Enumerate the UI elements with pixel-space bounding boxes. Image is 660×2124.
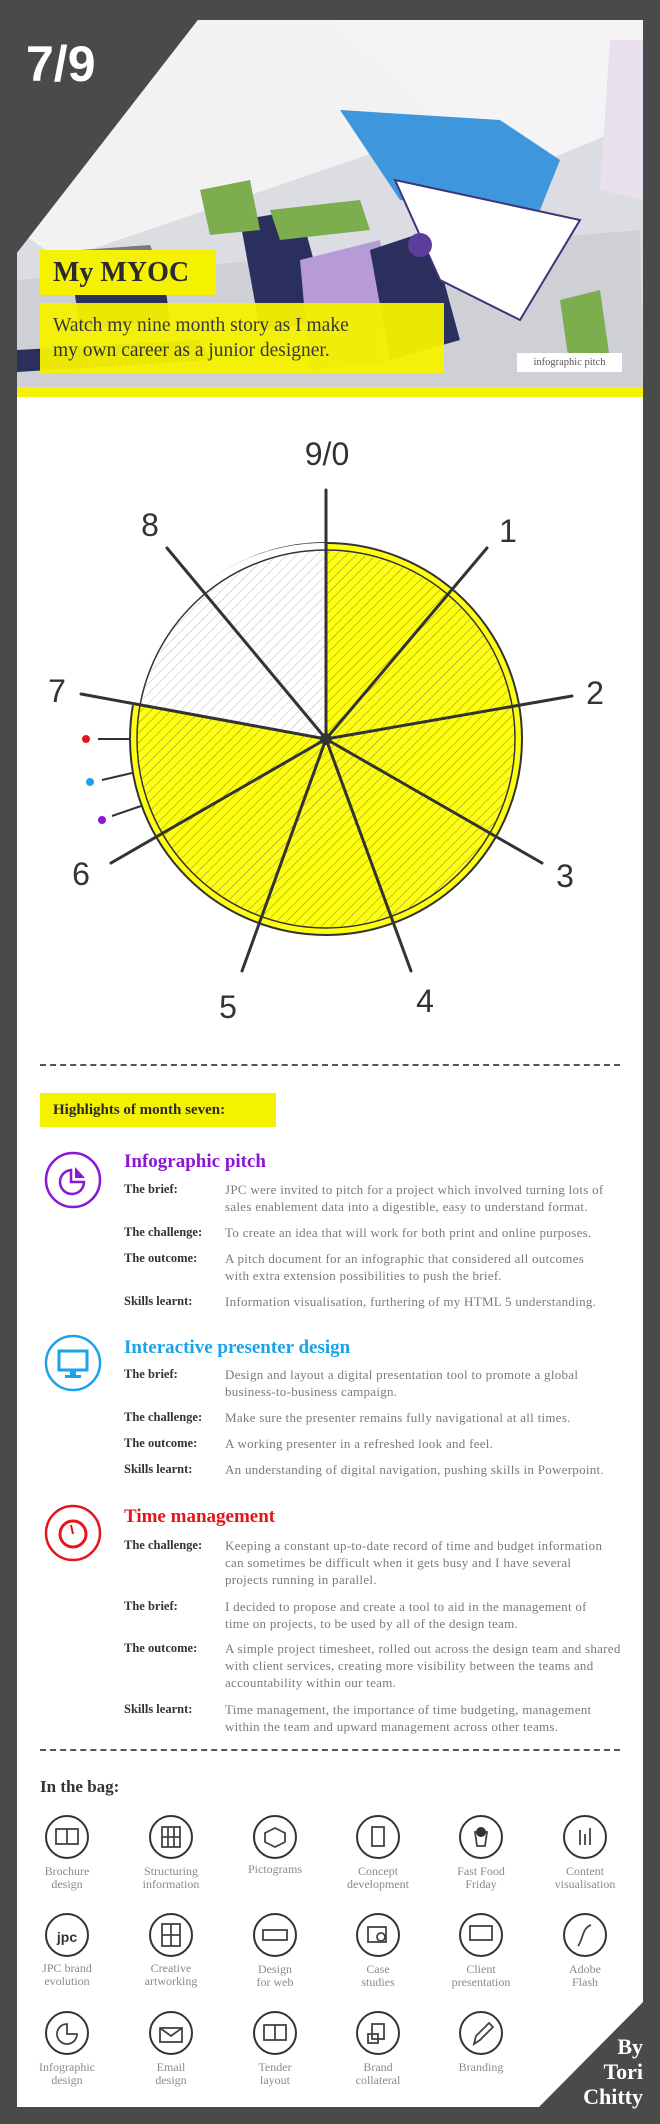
title: Infographic pitch xyxy=(124,1151,266,1172)
section: interactive presenter: A working presenter in a refreshed look and feel. xyxy=(225,1436,493,1451)
pie chart: months: 6 xyxy=(72,856,90,892)
skills icon grid: studies xyxy=(361,1975,395,1989)
pie chart: months: 3 xyxy=(556,858,574,894)
skills icon grid xyxy=(39,1815,616,2087)
section: time management: The challenge: xyxy=(124,1538,202,1552)
section: interactive presenter: business-to-business campaign. xyxy=(225,1384,397,1399)
subtitle box xyxy=(40,303,444,373)
section: time management: Skills learnt: xyxy=(124,1702,192,1716)
title box: My MYOC xyxy=(53,257,189,288)
section: time management: Keeping a constant up-to-date record of time and budget information xyxy=(225,1538,602,1553)
section: infographic pitch: The outcome: xyxy=(124,1251,197,1265)
section: time management: accountability within our team. xyxy=(225,1675,396,1690)
section: interactive presenter: Design and layout a digital presentation tool to promote a global xyxy=(225,1367,578,1382)
section: interactive presenter: The outcome: xyxy=(124,1436,197,1450)
skills icon grid: Flash xyxy=(572,1975,598,1989)
skills icon grid: Tender xyxy=(258,2060,292,2074)
byline: Tori xyxy=(603,2059,643,2084)
skills icon grid: information xyxy=(143,1877,199,1891)
section: time management: time on projects, to be used by all of the design team. xyxy=(225,1616,518,1631)
section: infographic pitch: sales enablement data into a digestible, easy to understand format. xyxy=(225,1199,588,1214)
skills icon grid: Fast Food xyxy=(457,1864,505,1878)
section: interactive presenter: Skills learnt: xyxy=(124,1462,192,1476)
pie chart: months: 2 xyxy=(586,675,604,711)
skills icon grid: Creative xyxy=(151,1961,191,1975)
section: infographic pitch: To create an idea that will work for both print and online purposes. xyxy=(225,1225,592,1240)
skills icon grid: Adobe xyxy=(569,1962,601,1976)
subtitle box: my own career as a junior designer. xyxy=(53,340,330,361)
section: interactive presenter: The challenge: xyxy=(124,1410,202,1424)
section: time management: The outcome: xyxy=(124,1641,197,1655)
pie chart: months: 9/0 xyxy=(305,436,349,472)
label: infographic pitch: infographic pitch xyxy=(533,357,606,368)
title box xyxy=(40,250,216,295)
subtitle box: Watch my nine month story as I make xyxy=(53,315,349,336)
pie chart: months xyxy=(48,436,604,1025)
title: Interactive presenter design xyxy=(124,1337,350,1358)
section: interactive presenter xyxy=(44,1334,604,1477)
skills icon grid: Email xyxy=(157,2060,185,2074)
section: infographic pitch: The brief: xyxy=(124,1182,178,1196)
skills icon grid: jpc xyxy=(56,1929,77,1945)
month markers xyxy=(82,735,90,743)
skills icon grid: Brochure xyxy=(45,1864,89,1878)
skills icon grid: presentation xyxy=(452,1975,510,1989)
pie chart: months: 5 xyxy=(219,989,237,1025)
section: infographic pitch: The challenge: xyxy=(124,1225,202,1239)
skills icon grid: Client xyxy=(466,1962,496,1976)
skills icon grid: visualisation xyxy=(555,1877,615,1891)
section: interactive presenter: An understanding of digital navigation, pushing skills in Powerpoint. xyxy=(225,1462,604,1477)
section: infographic pitch: A pitch document for an infographic that considered all outcomes xyxy=(225,1251,584,1266)
skills icon grid: design xyxy=(51,1877,83,1891)
skills icon grid: Branding xyxy=(459,2060,503,2074)
section: time management: projects running in parallel. xyxy=(225,1572,377,1587)
byline: Chitty xyxy=(583,2084,643,2109)
skills icon grid: design xyxy=(51,2073,83,2087)
byline xyxy=(583,2034,643,2109)
section: time management xyxy=(44,1504,621,1734)
section: time management: The brief: xyxy=(124,1599,178,1613)
heading: highlights: Highlights of month seven: xyxy=(53,1102,225,1118)
skills icon grid: evolution xyxy=(44,1974,90,1988)
divider xyxy=(40,1749,620,1751)
skills icon grid: Design xyxy=(258,1962,292,1976)
skills icon grid: artworking xyxy=(145,1974,197,1988)
skills icon grid: collateral xyxy=(356,2073,400,2087)
heading: highlights xyxy=(40,1093,276,1127)
byline: By xyxy=(617,2034,643,2059)
skills icon grid: development xyxy=(347,1877,409,1891)
skills icon grid: layout xyxy=(260,2073,290,2087)
title: Time management xyxy=(124,1506,275,1527)
section: infographic pitch: Information visualisation, furthering of my HTML 5 understanding. xyxy=(225,1294,596,1309)
skills icon grid: Structuring xyxy=(144,1864,198,1878)
section: time management: I decided to propose and create a tool to aid in the management of xyxy=(225,1599,587,1614)
section: time management: with client services, creating more visibility between the teams and xyxy=(225,1658,594,1673)
section: interactive presenter: Make sure the presenter remains fully navigational at all times. xyxy=(225,1410,571,1425)
section: interactive presenter: The brief: xyxy=(124,1367,178,1381)
skills icon grid: for web xyxy=(256,1975,293,1989)
skills icon grid: design xyxy=(155,2073,187,2087)
section: time management: A simple project timesheet, rolled out across the design team and shared xyxy=(225,1641,621,1656)
pie chart: months: 8 xyxy=(141,507,159,543)
skills icon grid: Infographic xyxy=(39,2060,95,2074)
section: infographic pitch: JPC were invited to pitch for a project which involved turning lots of xyxy=(225,1182,603,1197)
skills icon grid: Content xyxy=(566,1864,604,1878)
section: infographic pitch xyxy=(44,1151,604,1309)
pie chart: months: 7 xyxy=(48,673,66,709)
skills icon grid: Pictograms xyxy=(248,1862,302,1876)
icon: monitor xyxy=(44,1334,102,1392)
pie chart: months: 4 xyxy=(416,983,434,1019)
skills icon grid: Case xyxy=(366,1962,390,1976)
page number 7/9: 7/9 xyxy=(26,36,96,92)
section: time management: can sometimes be difficult when it gets busy and I have several xyxy=(225,1555,571,1570)
yellow strip xyxy=(17,387,643,397)
label: infographic pitch xyxy=(517,353,622,372)
skills icon grid: JPC brand xyxy=(42,1961,92,1975)
icon: clock xyxy=(44,1504,102,1562)
section: time management: within the team and upward management across other teams. xyxy=(225,1719,558,1734)
section: infographic pitch: with extra extension possibilities to push the brief. xyxy=(225,1268,502,1283)
heading: in the bag: In the bag: xyxy=(40,1777,119,1796)
icon: pie xyxy=(44,1152,102,1208)
skills icon grid: Brand xyxy=(363,2060,393,2074)
section: infographic pitch: Skills learnt: xyxy=(124,1294,192,1308)
pie chart: months: 1 xyxy=(499,513,517,549)
skills icon grid: Friday xyxy=(465,1877,497,1891)
hero image xyxy=(17,20,643,397)
skills icon grid: Concept xyxy=(358,1864,398,1878)
divider xyxy=(40,1064,620,1066)
section: time management: Time management, the importance of time budgeting, management xyxy=(225,1702,591,1717)
